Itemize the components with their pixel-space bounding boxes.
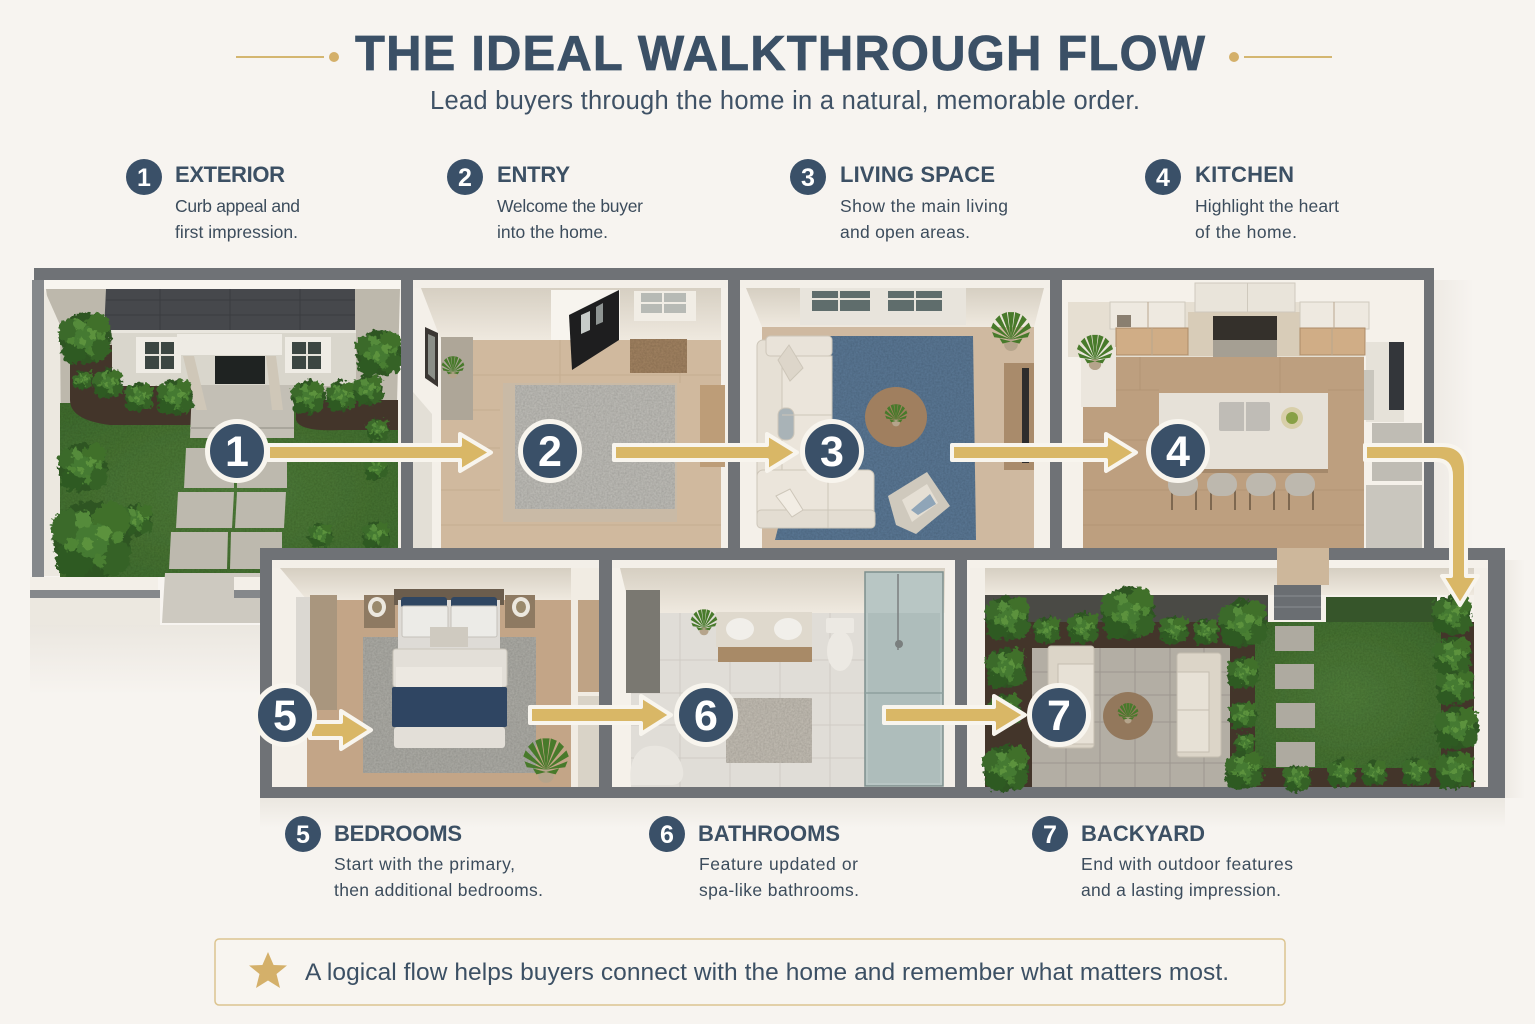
badge 3: 3 xyxy=(820,428,844,476)
subtitle: Lead buyers through the home in a natural, memorable order. xyxy=(430,87,1140,115)
step label: exterior: Curb appeal and xyxy=(175,196,300,216)
patio xyxy=(1032,648,1230,787)
room: bedroom xyxy=(272,560,599,787)
badge 5: 5 xyxy=(273,692,297,740)
bar stools xyxy=(1168,473,1315,510)
kitchen island xyxy=(1159,393,1328,473)
callout xyxy=(215,939,1285,1005)
step label: exterior: first impression. xyxy=(175,222,298,242)
upper and lower cabinets xyxy=(1110,302,1369,356)
badge 6: 6 xyxy=(694,692,718,740)
rug xyxy=(363,637,536,773)
badge 3 xyxy=(802,422,862,480)
room: kitchen xyxy=(1050,280,1424,548)
area rug xyxy=(503,383,677,522)
front garden wall xyxy=(30,577,262,625)
step label: bathrooms: spa-like bathrooms. xyxy=(699,880,859,900)
step label: backyard xyxy=(1032,816,1293,900)
bed xyxy=(392,589,507,748)
badge 4 xyxy=(1148,422,1208,480)
plant xyxy=(523,738,569,783)
floor plan: upper level xyxy=(30,268,1434,625)
room: backyard xyxy=(967,548,1488,792)
step label: bedrooms: BEDROOMS xyxy=(334,821,462,846)
window xyxy=(634,291,696,321)
step label: kitchen: of the home. xyxy=(1195,222,1297,242)
title right ornament xyxy=(1229,52,1332,62)
room: exterior xyxy=(30,280,402,625)
range hood and stove xyxy=(1195,283,1295,357)
house xyxy=(104,289,356,438)
badge 5 xyxy=(256,686,314,744)
title block xyxy=(236,27,1332,115)
step label: bedrooms: Start with the primary, xyxy=(334,854,515,874)
badge 7: 7 xyxy=(1047,692,1071,740)
doorway and door xyxy=(551,290,620,370)
arrow: 6 to 7 rooms xyxy=(530,696,671,734)
step label: living space: LIVING SPACE xyxy=(840,162,995,187)
badge 6 xyxy=(676,686,736,744)
toilet xyxy=(826,618,854,671)
vanity xyxy=(716,612,812,662)
step label: kitchen xyxy=(1145,159,1339,242)
step label: exterior xyxy=(126,159,300,242)
step label: bathrooms: Feature updated or xyxy=(699,854,858,874)
arrow: 2 to 3 xyxy=(614,434,797,471)
title: THE IDEAL WALKTHROUGH FLOW xyxy=(355,27,1206,81)
badge 7 xyxy=(1030,686,1088,744)
step label: kitchen: Highlight the heart xyxy=(1195,196,1339,216)
title left ornament xyxy=(236,52,339,62)
doormat xyxy=(630,339,687,373)
armchair xyxy=(888,472,950,534)
arrow: 3 to 4 xyxy=(952,434,1136,471)
bench xyxy=(700,385,725,467)
shower xyxy=(865,572,943,786)
left sofa xyxy=(1048,646,1094,748)
tub chair xyxy=(630,746,683,785)
step label: living space: and open areas. xyxy=(840,222,970,242)
badge 2 xyxy=(520,422,580,480)
stepping stones xyxy=(1275,626,1315,767)
blue rug xyxy=(775,336,976,540)
coffee table xyxy=(865,387,927,447)
soft floor shadows xyxy=(30,280,1525,828)
bath mat xyxy=(726,698,812,763)
nightstands xyxy=(364,595,535,628)
room: entry xyxy=(401,280,728,548)
walkway pavers xyxy=(162,448,287,623)
step label: entry: Welcome the buyer xyxy=(497,196,643,216)
step label: exterior: EXTERIOR xyxy=(175,162,285,187)
step label: exterior: 1 xyxy=(137,164,151,192)
callout text: A logical flow helps buyers connect with the home and remember what matters most. xyxy=(305,959,1229,986)
step label: entry: 2 xyxy=(458,164,472,192)
room: bathroom xyxy=(612,560,955,787)
shrubs xyxy=(51,312,402,579)
media console xyxy=(1004,363,1034,470)
window xyxy=(800,288,966,325)
closet xyxy=(296,595,337,710)
step label: bedrooms: 5 xyxy=(296,821,310,849)
arrow: 1 to 2 xyxy=(268,434,491,471)
floor plan: lower level xyxy=(260,548,1505,798)
console and picture xyxy=(425,327,473,420)
step label: backyard: BACKYARD xyxy=(1081,821,1205,846)
patio table xyxy=(1103,692,1153,740)
sectional sofa xyxy=(757,336,875,528)
right sofa xyxy=(1177,653,1221,757)
back door and steps xyxy=(1274,548,1329,620)
outer walls xyxy=(260,548,1505,798)
badge 2: 2 xyxy=(538,428,562,476)
step label: entry: into the home. xyxy=(497,222,608,242)
outer walls xyxy=(34,268,1434,550)
step label: living space xyxy=(790,159,1008,242)
garden shrubs xyxy=(982,587,1479,792)
arrow: into backyard xyxy=(884,696,1025,734)
lawn xyxy=(1255,622,1441,768)
fence xyxy=(985,595,1437,623)
step label: bathrooms: BATHROOMS xyxy=(698,821,840,846)
arrow: 4 to 7, bending down xyxy=(1365,445,1478,605)
step label: living space: 3 xyxy=(801,164,815,192)
arrow: 5 to 6 xyxy=(310,711,371,749)
step label: backyard: 7 xyxy=(1043,821,1057,849)
step label: entry: ENTRY xyxy=(497,162,570,187)
right side appliances xyxy=(1364,280,1424,548)
room: living space xyxy=(728,280,1050,548)
step label: bedrooms: then additional bedrooms. xyxy=(334,880,543,900)
step label: living space: Show the main living xyxy=(840,196,1008,216)
step label: bathrooms: 6 xyxy=(660,821,674,849)
garden bed xyxy=(985,622,1474,787)
step label: kitchen: 4 xyxy=(1156,164,1170,192)
counter plant xyxy=(1077,335,1116,407)
shelving xyxy=(626,590,660,693)
step label: backyard: End with outdoor features xyxy=(1081,854,1293,874)
badge 1 xyxy=(208,422,266,480)
counter plant xyxy=(691,609,717,635)
badge 1: 1 xyxy=(225,428,249,476)
step label: entry xyxy=(447,159,643,242)
badge 4: 4 xyxy=(1166,428,1190,476)
step label: bathrooms xyxy=(649,816,859,900)
potted plant xyxy=(991,312,1031,351)
icon: star xyxy=(249,952,287,988)
step label: bedrooms xyxy=(285,816,543,900)
step label: backyard: and a lasting impression. xyxy=(1081,880,1281,900)
step label: kitchen: KITCHEN xyxy=(1195,162,1294,187)
